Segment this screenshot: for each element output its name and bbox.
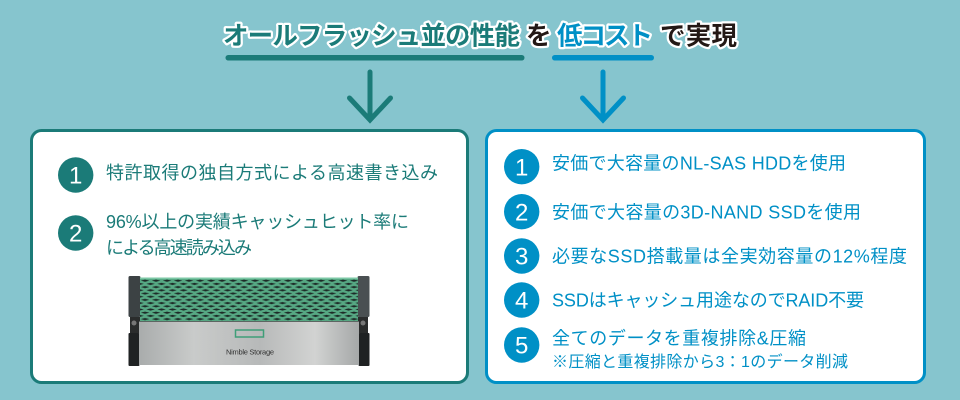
item 1 bbox=[58, 157, 438, 193]
item 3: 必要なSSD搭載量は全実効容量の12%程度 bbox=[552, 246, 907, 266]
server illustration bbox=[128, 276, 370, 366]
item 1: 1 bbox=[69, 163, 82, 190]
arrow: performance bbox=[350, 72, 390, 120]
panel: low cost bbox=[486, 130, 924, 382]
item 2: 2 bbox=[515, 199, 528, 226]
item 2 bbox=[504, 194, 861, 229]
item 1: 特許取得の独自方式による高速書き込み bbox=[106, 163, 438, 183]
item 2: 安価で大容量の3D-NAND SSDを使用 bbox=[552, 202, 861, 222]
item 2: による高速読み込み bbox=[106, 238, 252, 258]
item 1: 安価で大容量のNL-SAS HDDを使用 bbox=[552, 154, 846, 174]
item 4 bbox=[504, 282, 864, 318]
underline: performance bbox=[226, 55, 524, 60]
panel background bbox=[486, 130, 924, 382]
item 5: ※圧縮と重複排除から3：1のデータ削減 bbox=[552, 352, 848, 371]
item 5: 全てのデータを重複排除&圧縮 bbox=[552, 328, 806, 348]
server illustration: Nimble Storage bbox=[226, 348, 274, 356]
panel background bbox=[32, 130, 468, 382]
item 2: 96%以上の実績キャッシュヒット率に bbox=[106, 212, 409, 232]
item 4: SSDはキャッシュ用途なのでRAID不要 bbox=[552, 290, 864, 310]
item 5: 5 bbox=[515, 333, 528, 360]
item 1 bbox=[504, 149, 846, 184]
item 1: 1 bbox=[515, 154, 528, 181]
arrow: low cost bbox=[582, 72, 624, 120]
panel: performance bbox=[32, 130, 468, 382]
item 3 bbox=[504, 238, 907, 274]
item 3: 3 bbox=[515, 244, 528, 271]
title bbox=[223, 22, 737, 50]
item 2: 2 bbox=[69, 221, 82, 248]
title: オールフラッシュ並の性能 bbox=[223, 22, 520, 50]
title: で実現 bbox=[660, 22, 737, 50]
title: 低コスト bbox=[557, 22, 653, 50]
item 2 bbox=[58, 212, 409, 258]
item 4: 4 bbox=[515, 288, 528, 315]
underline: low cost bbox=[552, 55, 654, 60]
item 5 bbox=[504, 327, 848, 371]
title: を bbox=[526, 22, 552, 50]
